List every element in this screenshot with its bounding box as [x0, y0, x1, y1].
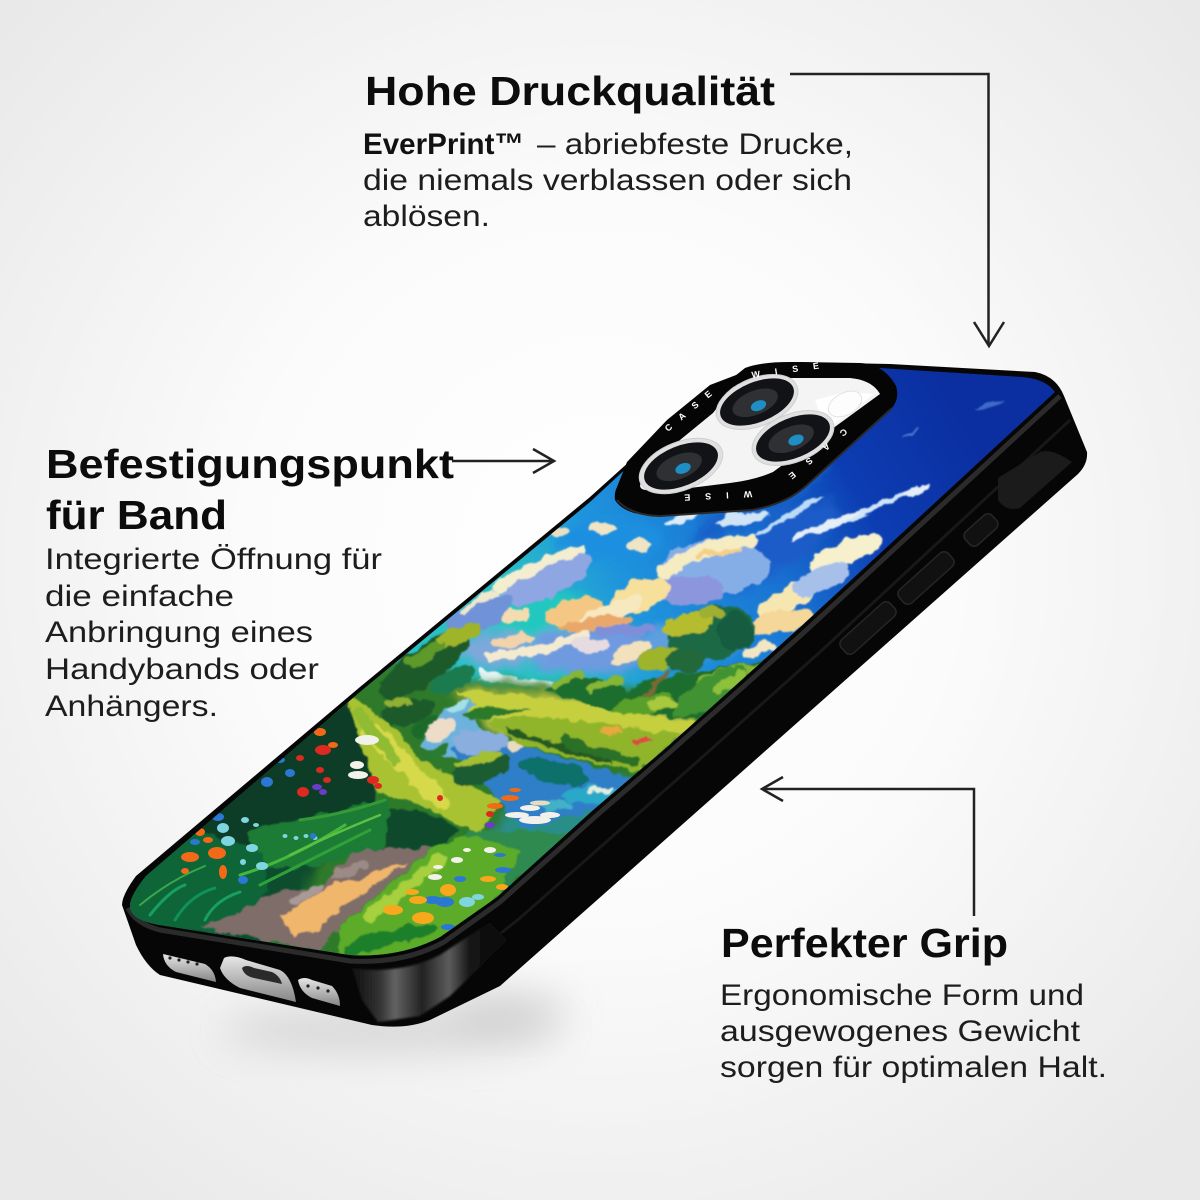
text block: print quality	[363, 68, 853, 233]
body: die niemals verblassen oder sich	[363, 164, 852, 197]
body: Anbringung eines	[45, 616, 313, 649]
charging port	[220, 956, 296, 1002]
camera bump	[615, 359, 897, 516]
lens 2	[744, 400, 842, 476]
left trees	[378, 622, 482, 740]
meadow base	[130, 658, 724, 956]
corner highlight	[352, 922, 508, 1022]
green grass strokes	[140, 800, 385, 920]
arrow: to grip side	[762, 777, 974, 916]
printed landscape artwork	[130, 368, 1055, 956]
case body	[122, 362, 1087, 1027]
body	[720, 979, 1107, 1084]
speaker left	[163, 954, 216, 982]
side buttons	[837, 451, 1072, 657]
sky tones	[459, 466, 840, 678]
phone case	[122, 362, 1087, 1027]
heading: Befestigungspunkt	[46, 441, 454, 487]
bump ring	[615, 362, 897, 516]
text block: grip	[720, 920, 1107, 1084]
heading: Perfekter Grip	[721, 920, 1008, 966]
body: die einfache	[45, 580, 234, 613]
heading: Hohe Druckqualität	[365, 68, 775, 114]
phone shadow	[220, 992, 570, 1054]
body: ablösen.	[363, 200, 490, 233]
clouds	[441, 399, 1006, 686]
arrow: to print surface	[790, 74, 1004, 346]
body	[363, 128, 853, 233]
heading	[46, 441, 454, 538]
body: – abriebfeste Drucke,	[537, 128, 853, 161]
brand text: WISE	[669, 489, 752, 503]
camera opening	[640, 378, 880, 490]
brand text: WISE	[751, 359, 834, 380]
lens 3	[631, 427, 731, 505]
body: ausgewogenes Gewicht	[720, 1015, 1081, 1048]
brand text: CASE	[775, 426, 849, 491]
brand text: CASE	[663, 382, 722, 434]
body: EverPrint™	[363, 128, 524, 161]
right foreground grass	[337, 835, 520, 965]
wildflowers	[181, 728, 560, 930]
body: sorgen für optimalen Halt.	[720, 1051, 1107, 1084]
body: Integrierte Öffnung für	[45, 543, 382, 576]
heading: für Band	[46, 492, 227, 538]
lens 1	[708, 364, 806, 440]
speaker right	[298, 978, 340, 1006]
text block: strap attachment	[45, 441, 454, 723]
yellow fields and banks	[456, 692, 700, 772]
brand text	[663, 359, 849, 503]
distant bushes and tree	[544, 603, 765, 721]
arrow: to strap attachment	[452, 449, 554, 473]
body: Handybands oder	[45, 653, 319, 686]
foreground dark flower bed	[110, 690, 570, 935]
body	[45, 543, 382, 723]
dirt path	[200, 847, 433, 950]
river	[420, 697, 640, 830]
grassy diagonal bank	[330, 696, 513, 835]
body: Ergonomische Form und	[720, 979, 1084, 1012]
side edge bevel	[128, 396, 1060, 961]
body: Anhängers.	[45, 690, 218, 723]
